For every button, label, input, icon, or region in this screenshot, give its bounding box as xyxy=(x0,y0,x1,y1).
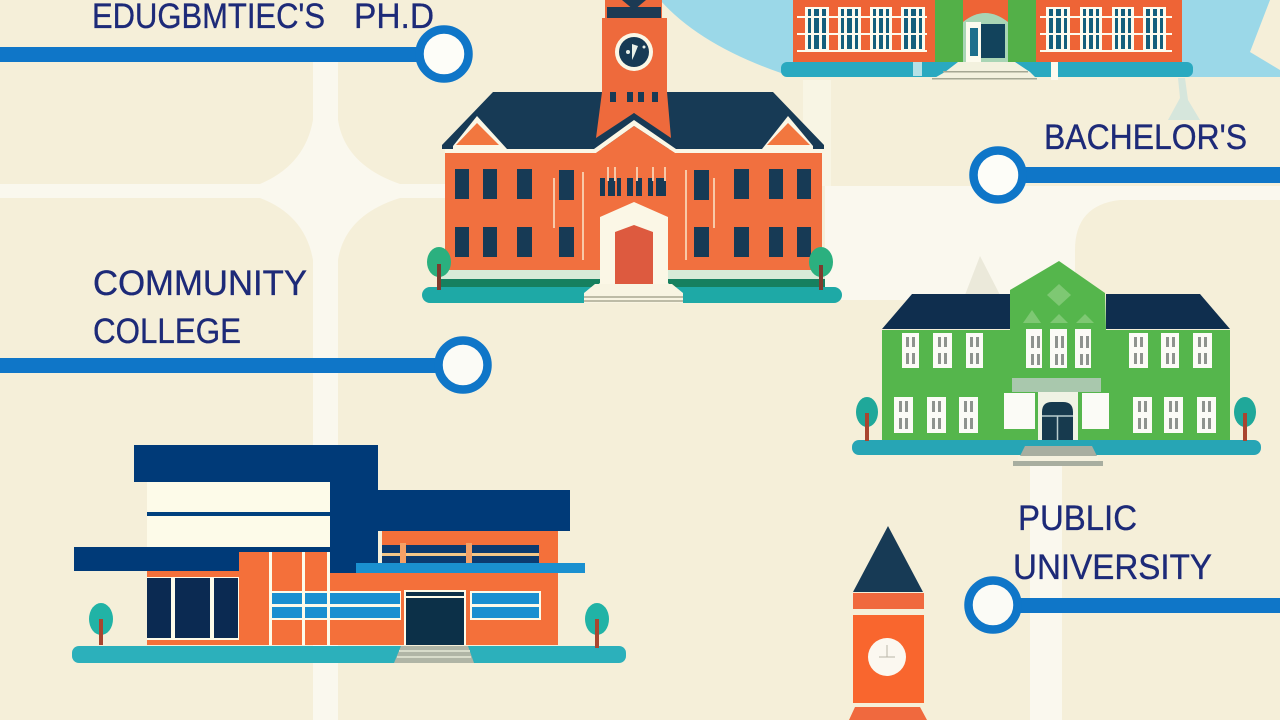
building: small clock tower xyxy=(849,526,927,720)
icon: tree right xyxy=(585,603,609,648)
connector: PhD line xyxy=(0,30,468,78)
icon: tree left xyxy=(427,247,451,290)
icon: tree right xyxy=(1234,397,1256,441)
connector: public university line xyxy=(968,580,1280,630)
building: green hall xyxy=(852,261,1261,466)
building: top red and green hall xyxy=(781,0,1193,80)
label: bachelor's: BACHELOR'S xyxy=(1044,118,1247,157)
lake behind top building xyxy=(660,0,1280,77)
icon: tree right xyxy=(809,247,833,290)
label: community college: COMMUNITY xyxy=(93,264,307,303)
icon: tower clock xyxy=(615,33,653,71)
icon: white clock face xyxy=(868,638,906,676)
connector: community college line xyxy=(0,340,488,390)
icon: tree left xyxy=(856,397,878,441)
building: community college xyxy=(72,445,626,663)
icon: tree left xyxy=(89,603,113,645)
label: public: PUBLIC xyxy=(1018,499,1137,538)
label: university: UNIVERSITY xyxy=(1013,548,1212,587)
building: main red brick hall with clock tower xyxy=(422,0,842,303)
connector: bachelor's line xyxy=(974,150,1280,200)
label: community college second line: COLLEGE xyxy=(93,312,241,351)
